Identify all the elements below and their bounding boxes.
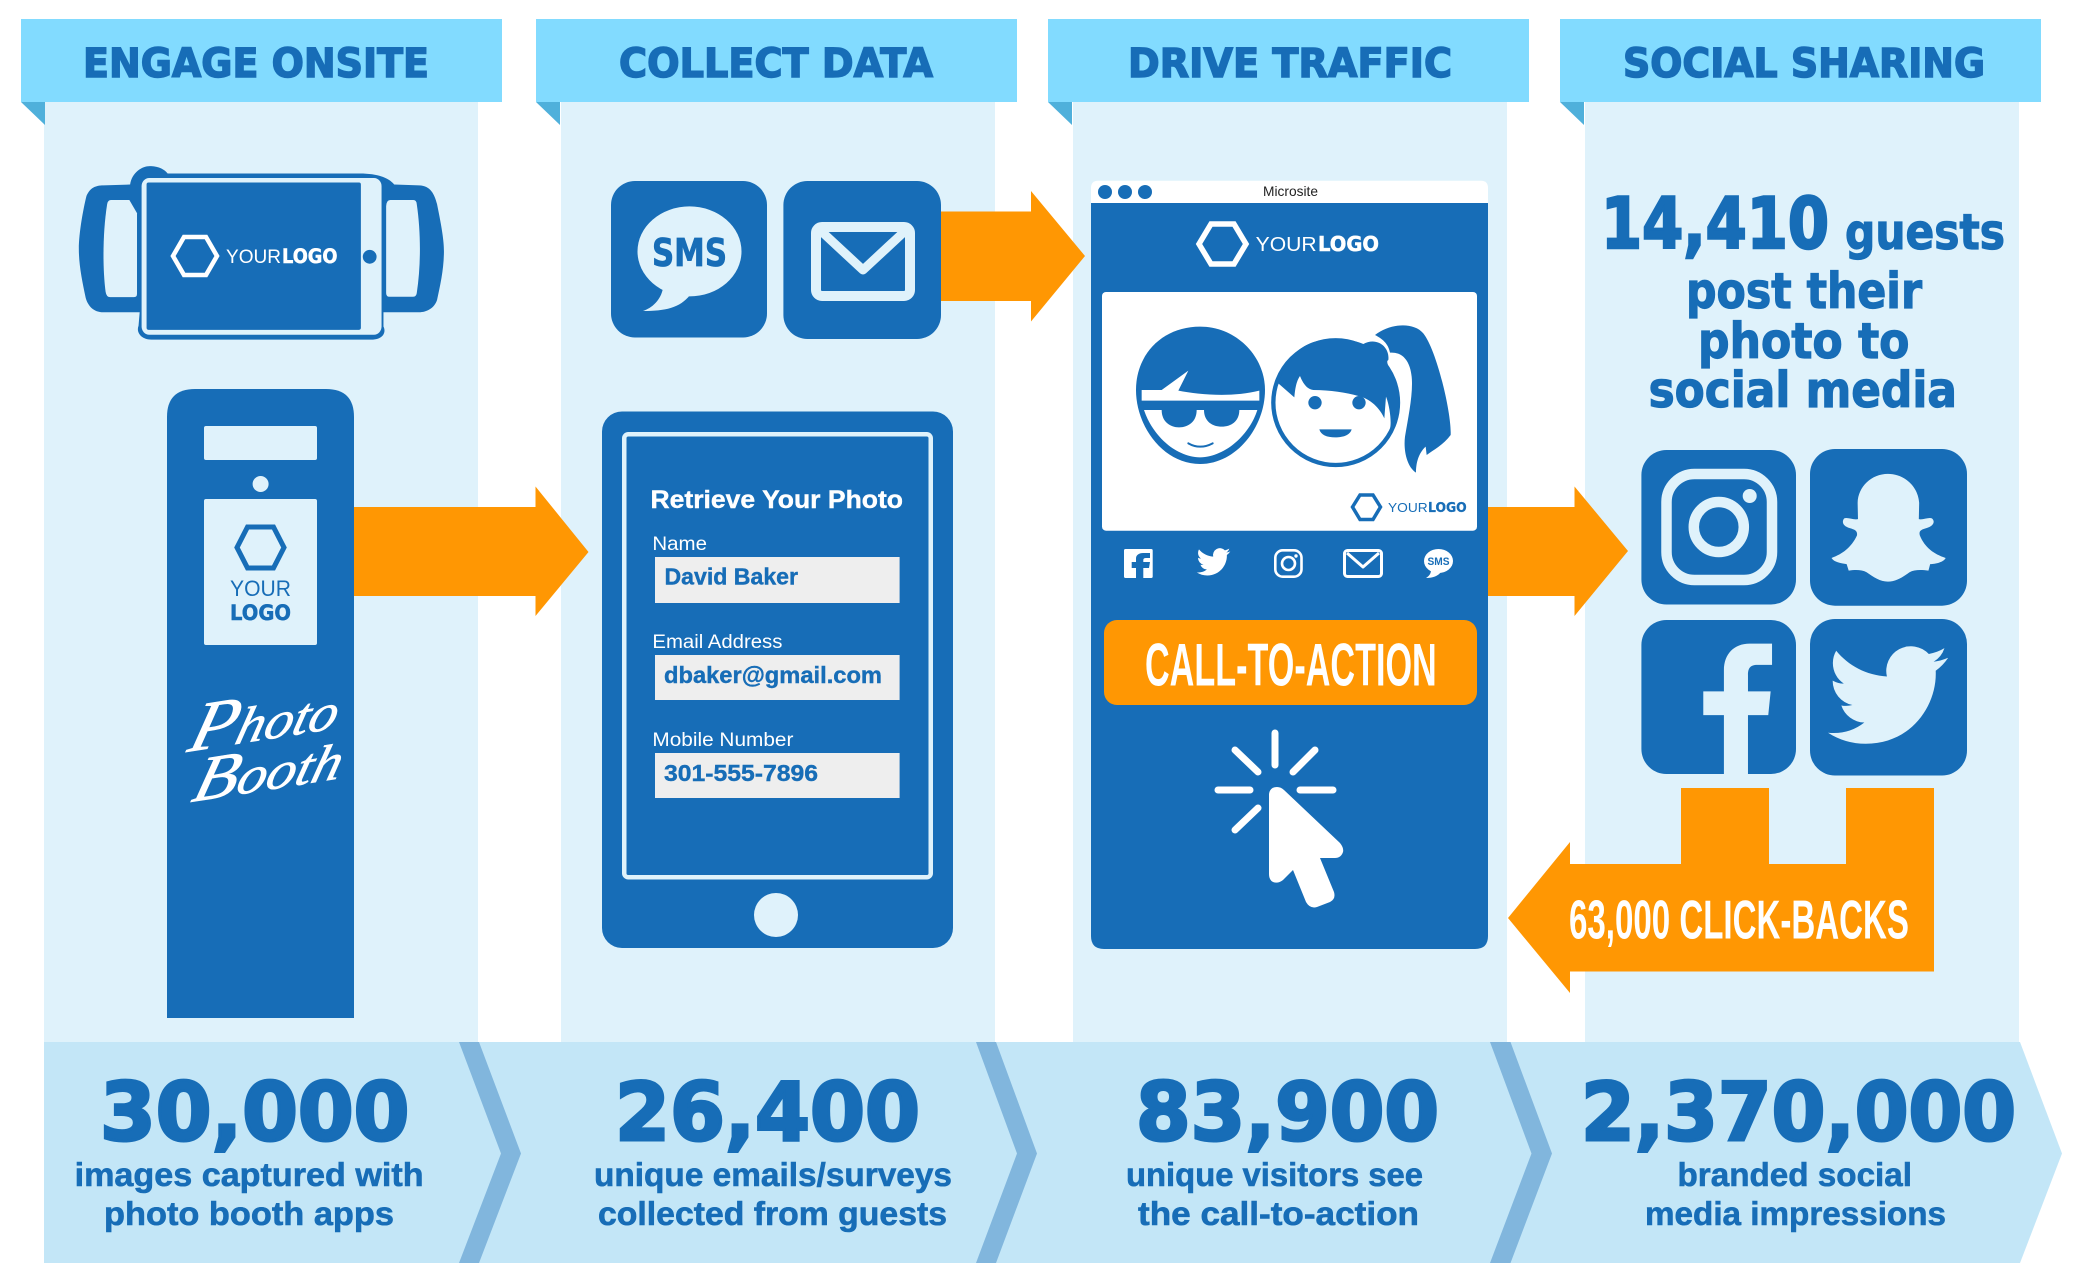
- stat: images captured: [75, 1066, 424, 1232]
- icon: clicking cursor: [1218, 733, 1343, 907]
- icon: photo booth kiosk: LOGO: [230, 601, 291, 625]
- stat band background: [44, 1042, 2062, 1263]
- icon: photo booth kiosk: YOUR: [230, 576, 291, 601]
- chevron divider 1: [459, 1042, 521, 1263]
- icon: photo booth kiosk: [167, 389, 354, 1018]
- panel: collect data column: [561, 102, 995, 1042]
- heading ribbon: drive traffic: [1048, 19, 1529, 125]
- stat: unique visitors: [1126, 1066, 1439, 1232]
- text block: guests post to social: [1601, 183, 2005, 419]
- button: call to action: CALL-TO-ACTION: [1145, 632, 1437, 698]
- icon: sms tile: SMS: [652, 231, 727, 275]
- panel: retrieve your photo tablet form: Email Address: [652, 632, 782, 653]
- text block: guests post to social: post their: [1686, 263, 1923, 320]
- chevron divider 2: [976, 1042, 1037, 1263]
- icon: photo booth kiosk: Booth: [186, 721, 354, 817]
- icon: tablet in grip case: YOUR: [226, 246, 281, 268]
- panel: retrieve your photo tablet form: Name: [652, 534, 707, 555]
- panel: retrieve your photo tablet form: Mobile Number: [652, 730, 794, 751]
- heading ribbon: drive traffic: DRIVE TRAFFIC: [1128, 41, 1452, 87]
- icon row: share options: SMS: [1428, 556, 1450, 568]
- arrow: traffic to social: [1488, 486, 1628, 616]
- icon: email tile: [783, 181, 941, 339]
- heading ribbon: engage onsite: ENGAGE ONSITE: [83, 41, 429, 87]
- stat: images captured: 30,000: [100, 1066, 410, 1159]
- stat: emails collected: collected from guests: [598, 1195, 947, 1232]
- panel: retrieve your photo tablet form: David Baker: [664, 564, 798, 590]
- panel: microsite browser window: YOUR: [1388, 500, 1428, 515]
- button: call to action: [1104, 620, 1477, 705]
- panel: microsite browser window: YOUR: [1256, 234, 1317, 256]
- chevron divider 3: [1490, 1042, 1552, 1263]
- stat: emails collected: [594, 1066, 952, 1232]
- icon: sms tile: [611, 181, 767, 338]
- icon: tablet in grip case: LOGO: [282, 245, 338, 268]
- panel: microsite browser window: LOGO: [1318, 232, 1379, 256]
- text block: guests post to social: guests: [1845, 204, 2005, 261]
- stat: social impressions: [1581, 1066, 2016, 1232]
- text block: guests post to social: 14,410: [1601, 183, 1829, 265]
- panel: microsite browser window: [1091, 181, 1488, 949]
- icon: photo booth kiosk: Photo: [181, 665, 351, 768]
- panel: retrieve your photo tablet form: Retrieve Your Photo: [650, 486, 903, 514]
- stat: social impressions: media impressions: [1645, 1195, 1946, 1232]
- heading ribbon: social sharing: [1560, 19, 2041, 125]
- panel: engage onsite column: [44, 102, 478, 1042]
- panel: retrieve your photo tablet form: 301-555-7896: [664, 760, 818, 786]
- panel: retrieve your photo tablet form: dbaker@gmail.com: [664, 662, 882, 688]
- heading ribbon: social sharing: SOCIAL SHARING: [1623, 41, 1985, 87]
- stat: unique visitors: the call-to-action: [1138, 1195, 1419, 1232]
- panel: retrieve your photo tablet form: [602, 412, 953, 948]
- panel: drive traffic column: [1073, 102, 1507, 1042]
- stat: emails collected: 26,400: [615, 1066, 920, 1159]
- stat: unique visitors: 83,900: [1136, 1066, 1439, 1159]
- arrow: collect to traffic: [941, 191, 1085, 322]
- heading ribbon: engage onsite: [21, 19, 502, 125]
- panel: microsite browser window: Microsite: [1263, 183, 1318, 199]
- stat: social impressions: branded social: [1678, 1156, 1912, 1193]
- icon: tablet in grip case: [79, 166, 444, 340]
- stat: emails collected: unique emails/surveys: [594, 1156, 952, 1193]
- text block: guests post to social: photo to: [1698, 313, 1910, 370]
- icon: twitter tile: [1810, 619, 1967, 776]
- icon row: share options: [1124, 548, 1453, 578]
- panel: social sharing column: [1585, 102, 2019, 1042]
- illustration: boy and girl faces: [1136, 325, 1451, 473]
- arrow: engage to collect: [354, 486, 588, 616]
- icon: facebook tile: [1641, 620, 1796, 774]
- heading ribbon: collect data: [536, 19, 1017, 125]
- icon: snapchat tile: [1810, 449, 1967, 606]
- heading ribbon: collect data: COLLECT DATA: [619, 41, 933, 87]
- stat: images captured: images captured with: [75, 1156, 424, 1193]
- arrow: click-backs return: [1508, 788, 1934, 993]
- panel: microsite browser window: LOGO: [1428, 501, 1467, 516]
- stat: social impressions: 2,370,000: [1581, 1066, 2016, 1159]
- stat: unique visitors: unique visitors see: [1126, 1156, 1423, 1193]
- icon: instagram tile: [1641, 450, 1796, 604]
- text block: guests post to social: social media: [1649, 362, 1957, 419]
- stat: images captured: photo booth apps: [104, 1195, 394, 1232]
